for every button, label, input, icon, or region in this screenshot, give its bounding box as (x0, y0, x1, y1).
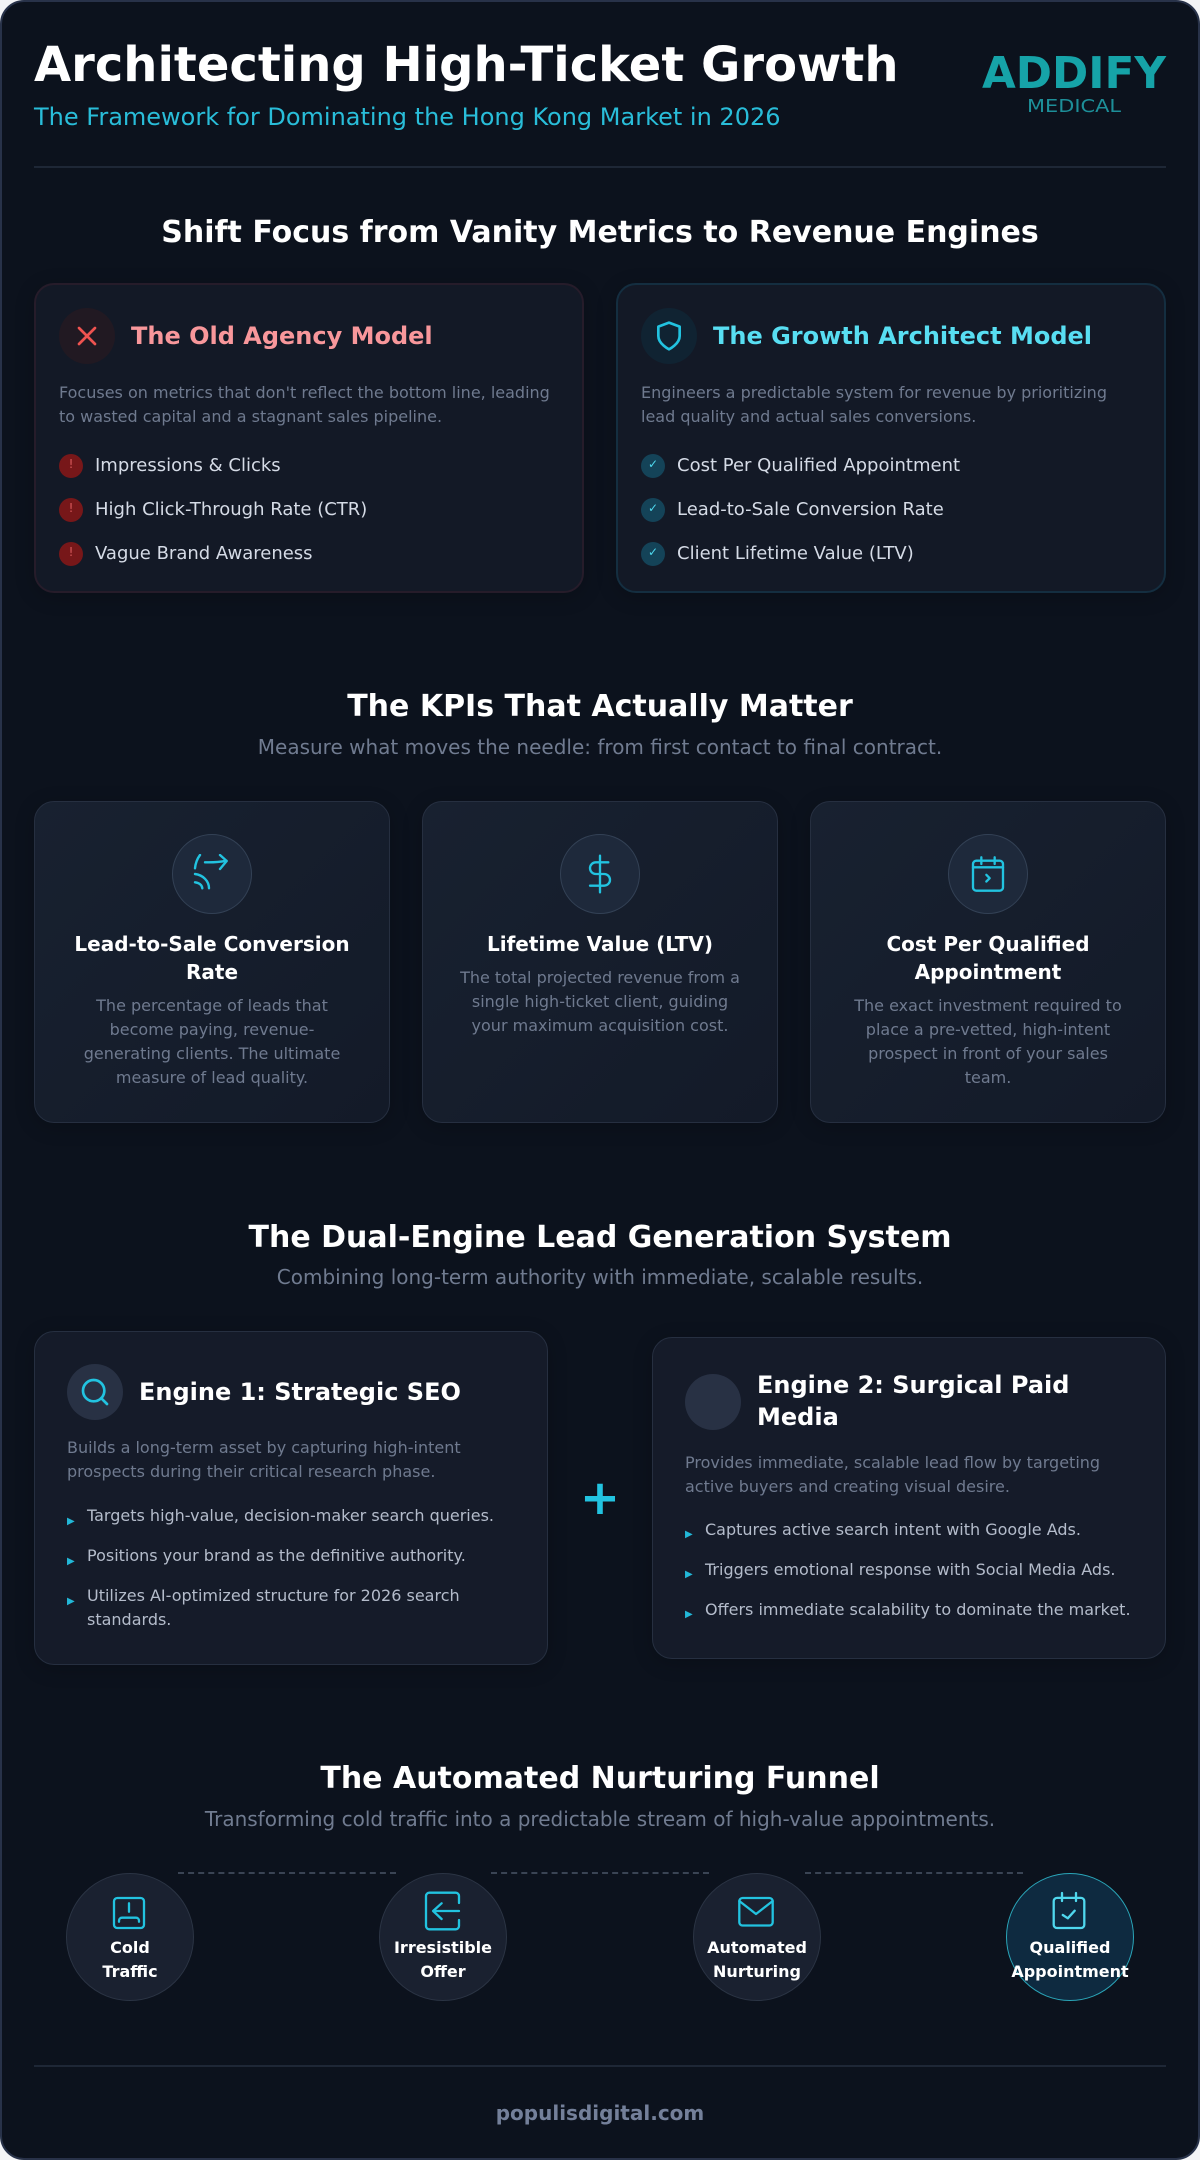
list item: Lead-to-Sale Conversion Rate (677, 499, 944, 520)
title: Lead-to-Sale Conversion (74, 932, 350, 956)
description: Focuses on metrics that don't reflect the bottom line, leading (59, 383, 550, 402)
bullet: ▶ (67, 1516, 75, 1527)
icon: shield (641, 308, 697, 364)
heading: funnel: The Automated Nurturing Funnel (320, 1761, 880, 1796)
list item: ✓ (648, 501, 658, 515)
icon: cold (112, 1896, 146, 1930)
description (59, 383, 550, 426)
title: Appointment (915, 960, 1061, 984)
bullet text: Utilizes AI-optimized structure for 2026 search (87, 1586, 460, 1605)
heading: old agency model: The Old Agency Model (131, 322, 433, 350)
panel: KPI lifetime value (422, 801, 778, 1123)
title: Cost Per Qualified (886, 932, 1090, 956)
panel: old agency model (34, 283, 584, 593)
heading: shift focus: Shift Focus from Vanity Metrics to Revenue Engines (161, 215, 1039, 250)
label: Traffic (102, 1962, 158, 1981)
icon: calendar (948, 834, 1028, 914)
description: The percentage of leads that (96, 996, 328, 1015)
bullet text: Captures active search intent with Google Ads. (705, 1520, 1081, 1539)
description: Provides immediate, scalable lead flow by targeting (685, 1453, 1100, 1472)
description: single high-ticket client, guiding (472, 992, 728, 1011)
funnel step: cold traffic (66, 1873, 194, 2001)
bullet text: Triggers emotional response with Social Media Ads. (705, 1560, 1116, 1579)
subheading: KPIs: Measure what moves the needle: from first contact to final contract. (258, 735, 942, 759)
description (460, 968, 740, 1035)
title (886, 932, 1090, 984)
icon: mail (738, 1896, 774, 1927)
description: Builds a long-term asset by capturing high-intent (67, 1438, 461, 1457)
panel: engine 1 (34, 1331, 548, 1665)
subheading: funnel: Transforming cold traffic into a predictable stream of high-value appointments. (205, 1807, 995, 1831)
label (102, 1938, 158, 1981)
heading: Engine 1: Strategic SEO (139, 1378, 461, 1406)
title: Lifetime Value (LTV) (487, 932, 713, 956)
label: Automated (707, 1938, 807, 1957)
description: Engineers a predictable system for revenue by prioritizing (641, 383, 1107, 402)
description: lead quality and actual sales conversions. (641, 407, 976, 426)
label: Cold (110, 1938, 150, 1957)
label: Irresistible (394, 1938, 492, 1957)
label (707, 1938, 807, 1981)
funnel step: qualified appointment (1006, 1873, 1134, 2001)
icon: calendar check (1052, 1892, 1086, 1930)
description: your maximum acquisition cost. (472, 1016, 728, 1035)
list item: High Click-Through Rate (CTR) (95, 499, 367, 520)
heading: KPIs: The KPIs That Actually Matter (347, 689, 853, 724)
subtitle: The Framework for Dominating the Hong Kong Market in 2026 (34, 103, 780, 131)
title: Rate (186, 960, 238, 984)
label (394, 1938, 492, 1981)
icon: x mark (59, 308, 115, 364)
label: Appointment (1011, 1962, 1129, 1981)
description (67, 1438, 461, 1481)
bullet: ▶ (67, 1556, 75, 1567)
list item: Client Lifetime Value (LTV) (677, 543, 914, 564)
bullet text: Positions your brand as the definitive authority. (87, 1546, 466, 1565)
list item: Cost Per Qualified Appointment (677, 455, 960, 476)
bullet text: Offers immediate scalability to dominate the market. (705, 1600, 1131, 1619)
label: Offer (420, 1962, 466, 1981)
title: Architecting High-Ticket Growth (34, 37, 899, 93)
label: Qualified (1030, 1938, 1110, 1957)
icon: conversion (172, 834, 252, 914)
panel: growth architect model (616, 283, 1166, 593)
panel: engine 2 (652, 1337, 1166, 1659)
description: generating clients. The ultimate (84, 1044, 340, 1063)
heading: dual engine: The Dual-Engine Lead Generation System (249, 1220, 951, 1255)
description: to wasted capital and a stagnant sales pipeline. (59, 407, 442, 426)
bullet: ▶ (685, 1529, 693, 1540)
list item: Impressions & Clicks (95, 455, 281, 476)
funnel step: automated nurturing (693, 1873, 821, 2001)
heading: Media (757, 1403, 839, 1431)
list item: ✓ (648, 545, 658, 559)
heading (757, 1371, 1069, 1431)
description: become paying, revenue- (110, 1020, 314, 1039)
list item: ! (69, 457, 73, 471)
list item: Vague Brand Awareness (95, 543, 313, 564)
funnel step: irresistible offer (379, 1873, 507, 2001)
plus sign: + (580, 1470, 620, 1526)
description: The exact investment required to (854, 996, 1122, 1015)
panel: KPI conversion rate (34, 801, 390, 1123)
bullet text (87, 1586, 460, 1629)
description: prospect in front of your sales (868, 1044, 1108, 1063)
icon: dollar (560, 834, 640, 914)
bullet text: Targets high-value, decision-maker search queries. (87, 1506, 494, 1525)
footer: populisdigital.com (496, 2101, 704, 2125)
list item: ✓ (648, 457, 658, 471)
bullet: ▶ (67, 1596, 75, 1607)
description: measure of lead quality. (116, 1068, 308, 1087)
heading: Engine 2: Surgical Paid (757, 1371, 1069, 1399)
heading: growth architect: The Growth Architect Model (713, 322, 1092, 350)
description: prospects during their critical research phase. (67, 1462, 435, 1481)
bullet: ▶ (685, 1569, 693, 1580)
description (854, 996, 1122, 1087)
label: Nurturing (713, 1962, 801, 1981)
bullet: ▶ (685, 1609, 693, 1620)
description: active buyers and creating visual desire. (685, 1477, 1010, 1496)
subheading: dual engine: Combining long-term authority with immediate, scalable results. (277, 1265, 923, 1289)
description (84, 996, 340, 1087)
logo: Addify Medical: MEDICAL (1027, 96, 1121, 117)
description: The total projected revenue from a (460, 968, 740, 987)
icon: search (67, 1364, 123, 1420)
list item: ! (69, 545, 73, 559)
icon: blank circle (685, 1374, 741, 1430)
panel: KPI cost per appointment (810, 801, 1166, 1123)
label (1011, 1938, 1129, 1981)
description (685, 1453, 1100, 1496)
description: team. (965, 1068, 1011, 1087)
bullet text: standards. (87, 1610, 171, 1629)
title (74, 932, 350, 984)
description (641, 383, 1107, 426)
icon: entry arrow (424, 1892, 460, 1930)
list item: ! (69, 501, 73, 515)
description: place a pre-vetted, high-intent (866, 1020, 1110, 1039)
